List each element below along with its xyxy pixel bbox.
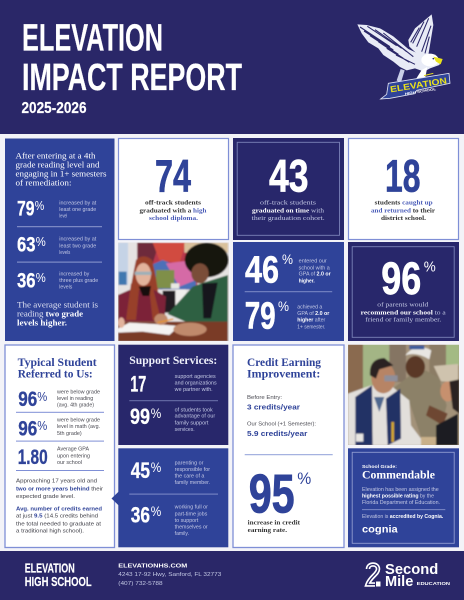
stat: 79 percent GPA: 79	[245, 295, 276, 337]
stat: 1.80 GPA: our school	[57, 460, 82, 466]
stat: 99 percent: %	[151, 406, 161, 421]
typical student paragraphs: expected grade level.	[16, 494, 75, 500]
report year: 2025-2026	[22, 100, 87, 117]
stat: 95 percent: earning rate.	[248, 527, 287, 534]
title: ELEVATION	[22, 18, 163, 60]
logo: Elevation eagle: ELEVATION	[389, 75, 448, 94]
stat: 95 percent: increase in credit	[248, 519, 301, 526]
stat: 17 agencies: support agencies	[175, 374, 216, 380]
panel: 18 returned: students caught up	[375, 200, 433, 207]
panel: 74 diploma: 74	[155, 151, 191, 202]
reading intro text: grade reading level and	[16, 159, 100, 169]
accreditation: Elevation is accredited by Cognia.	[362, 514, 444, 520]
credit earning heading: Improvement:	[247, 369, 320, 381]
credits at our school	[247, 421, 316, 438]
cognia wordmark: cognia	[362, 524, 398, 536]
stat: 96 percent math: %	[37, 418, 48, 433]
panel: 96 percent parents	[348, 242, 459, 341]
school grade label	[362, 464, 435, 482]
panel: family responsibilities	[112, 448, 228, 547]
stat: 17 agencies: we partner with.	[175, 387, 213, 393]
stat: 1.80 GPA: 1.80	[18, 446, 48, 469]
footer contact details: 4243 17-92 Hwy, Sanford, FL 32773	[118, 572, 221, 578]
photo: graduate with family	[346, 342, 461, 449]
stat: 17 agencies: and organizations	[175, 381, 217, 387]
average student text: reading two grade	[17, 309, 83, 319]
header band	[0, 0, 464, 134]
stat: 63 percent: 63	[17, 234, 36, 257]
panel: 18 returned: and returned to their	[371, 207, 435, 214]
stat: 95 percent: 95	[249, 463, 295, 525]
panel: 96 percent parents: %	[424, 259, 436, 275]
stat: 96 percent math: 5th grade)	[57, 431, 82, 437]
panel: 96 percent parents: of parents would	[377, 302, 429, 309]
logo: Elevation eagle: HIGH SCHOOL	[405, 87, 436, 96]
stat: 79 percent: least one grade	[59, 207, 97, 213]
typical student paragraphs: the total needed to graduate at	[16, 521, 101, 527]
credits before entry: 3 credits/year	[247, 402, 300, 411]
credit earning heading: Credit Earning	[247, 357, 321, 369]
panel: 74 diploma: graduated with a high	[140, 207, 207, 214]
panel: 18 returned	[348, 138, 458, 240]
stat: 46 percent: 46	[245, 250, 279, 292]
footer school name: HIGH SCHOOL	[25, 574, 92, 589]
stat: 79 percent: increased by at	[59, 200, 97, 206]
stat: 79 percent: 79	[17, 198, 34, 220]
average student text: The average student is	[17, 300, 99, 310]
stat: 63 percent: increased by at	[59, 237, 97, 243]
stat: 63 percent: %	[36, 234, 46, 249]
stat: 36 percent: three plus grade	[59, 278, 99, 284]
credits at our school: 5.9 credits/year	[247, 429, 307, 438]
stat: 96 percent math: 96	[18, 417, 37, 440]
credits before entry: Before Entry:	[247, 395, 282, 401]
typical student paragraphs: at just 9.5 (14.5 credits behind	[16, 514, 98, 520]
stat: 36 percent: %	[36, 270, 46, 285]
stat: 79 percent GPA: GPA of 2.0 or	[297, 311, 329, 317]
footer school name: ELEVATION	[25, 561, 75, 576]
logo: Second Mile Education: Mile	[385, 573, 413, 590]
grade description: Elevation has been assigned the	[362, 487, 439, 493]
grade description	[362, 487, 440, 506]
stat: 46 percent: GPA of 2.0 or	[299, 272, 331, 278]
stat: 79 percent GPA: achieved a	[297, 304, 323, 310]
stat: 36 percent jobs: family.	[175, 531, 189, 537]
average student text	[17, 300, 99, 328]
footer contact details: (407) 732-5788	[118, 581, 163, 587]
stat: 45 percent: responsible for	[175, 467, 210, 473]
photo: students studying	[116, 240, 231, 343]
stat: 96 percent reading: level in reading	[57, 396, 94, 402]
panel: 43 on time	[233, 138, 344, 240]
typical student paragraphs: two or more years behind their	[16, 486, 103, 492]
stat: 79 percent GPA: higher after	[297, 317, 326, 323]
logo: Second Mile Education: EDUCATION	[417, 581, 450, 586]
stat: 45 percent: %	[151, 460, 161, 475]
title	[22, 18, 242, 99]
callout pointer	[112, 492, 118, 505]
footer	[0, 551, 464, 600]
reading intro text: After entering at a 4th	[16, 150, 96, 160]
stat: 63 percent: least two grade	[59, 243, 97, 249]
stat: 79 percent GPA: %	[278, 299, 289, 314]
average student text: levels higher.	[17, 318, 67, 328]
stat: 36 percent jobs: themselves or	[175, 524, 208, 530]
typical student paragraphs: Avg. number of credits earned	[16, 506, 103, 512]
stat: 79 percent GPA	[245, 295, 329, 337]
stat: 99 percent: advantage of our	[175, 414, 216, 420]
reading intro text: of remediation:	[16, 177, 72, 187]
stat: 36 percent: levels	[59, 285, 73, 291]
stat: 46 percent: entered our	[299, 259, 327, 265]
panel: credit earning	[233, 345, 344, 548]
logo: Second Mile Education: Second	[385, 561, 438, 578]
stat: 1.80 GPA: Average GPA	[57, 447, 90, 453]
stat: 36 percent jobs: working full or	[175, 505, 208, 511]
stat: 99 percent: 99	[130, 404, 150, 429]
panel: school grade	[348, 448, 459, 547]
stat: 45 percent: 45	[131, 458, 150, 483]
credit earning heading	[247, 357, 321, 381]
stat: 96 percent reading	[18, 388, 100, 411]
stat: 45 percent: parenting or	[175, 460, 204, 466]
school grade label: Commendable	[362, 470, 435, 482]
panel: GPA stats	[233, 242, 344, 341]
stat: 63 percent: levels	[59, 250, 71, 256]
logo: Second Mile Education	[368, 561, 450, 590]
stat: 96 percent math: level in math (avg.	[57, 424, 100, 430]
stat: 46 percent: school with a	[299, 265, 330, 271]
stat: 79 percent: level	[59, 214, 67, 220]
typical student paragraphs	[16, 479, 103, 535]
stat: 36 percent jobs: part-time jobs	[175, 511, 208, 517]
footer contact details: ELEVATIONHS.COM	[118, 563, 188, 569]
credits at our school: Our School (+1 Semester):	[247, 421, 316, 427]
stat: 99 percent	[130, 404, 216, 433]
stat: 96 percent reading: %	[37, 389, 48, 404]
panel: 74 diploma: off-track students	[145, 200, 201, 207]
reading intro text	[16, 150, 107, 187]
panel: typical student	[5, 345, 114, 548]
stat: 36 percent: 36	[17, 270, 36, 292]
stat: 96 percent reading: (avg. 4th grade)	[57, 403, 94, 409]
stat: 95 percent: %	[297, 469, 311, 488]
typical student heading: Typical Student	[18, 357, 97, 369]
credits before entry	[247, 395, 300, 411]
typical student paragraphs: Approaching 17 years old and	[16, 479, 97, 485]
stat: 17 agencies: 17	[130, 372, 146, 397]
grade description: Florida Department of Education.	[362, 500, 440, 506]
panel: 43 on time: their graduation cohort.	[252, 215, 325, 222]
typical student heading: Referred to Us:	[18, 369, 93, 381]
panel: 96 percent parents: recommend our school to a	[361, 309, 446, 316]
panel: 74 diploma	[118, 138, 228, 240]
panel: support services	[118, 345, 228, 445]
grade description: highest possible rating by the	[362, 494, 434, 500]
panel: 43 on time: off-track students	[260, 200, 317, 207]
typical student paragraphs: a traditional high school).	[16, 529, 84, 535]
stat: 96 percent reading: 96	[18, 388, 37, 411]
stat: 1.80 GPA: upon entering	[57, 453, 90, 459]
stat: 99 percent: of students took	[175, 407, 213, 413]
panel: 43 on time: graduated on time with	[252, 207, 325, 214]
stat: 36 percent jobs: to support	[175, 518, 199, 524]
stat: 45 percent	[131, 458, 210, 486]
panel: 74 diploma: school diploma.	[149, 215, 198, 222]
stat: 96 percent math	[18, 417, 100, 440]
stat: 96 percent reading: were below grade	[57, 389, 100, 395]
stat: 17 agencies	[130, 372, 217, 397]
stat: 46 percent: higher.	[299, 278, 315, 284]
panel: 96 percent parents: 96	[381, 253, 421, 304]
panel: reading gains	[5, 138, 114, 341]
support services heading: Support Services:	[129, 355, 217, 367]
stat: 46 percent	[245, 250, 331, 292]
stat: 1.80 GPA	[18, 446, 90, 469]
stat: 99 percent: family support	[175, 420, 209, 426]
stat: 45 percent: family member.	[175, 480, 210, 486]
panel: 18 returned: district school.	[381, 215, 426, 222]
school grade label: School Grade:	[362, 464, 398, 469]
reading intro text: engaging in 1+ semesters	[16, 168, 107, 178]
stat: 79 percent	[17, 198, 97, 220]
stat: 46 percent: %	[282, 252, 293, 267]
stat: 36 percent: increased by	[59, 271, 90, 277]
stat: 63 percent	[17, 234, 97, 257]
stat: 79 percent GPA: 1+ semester.	[297, 324, 325, 330]
stat: 79 percent: %	[35, 198, 45, 213]
stat: 36 percent	[17, 270, 99, 292]
typical student heading	[18, 357, 97, 381]
stat: 45 percent: the care of a	[175, 473, 205, 479]
stat: 36 percent jobs: %	[151, 504, 161, 519]
stat: 36 percent jobs	[131, 502, 208, 537]
logo: Elevation eagle	[357, 14, 450, 99]
stat: 96 percent math: were below grade	[57, 418, 100, 424]
footer contact details	[118, 563, 221, 587]
stat: 99 percent: services.	[175, 427, 195, 433]
panel: 96 percent parents: friend or family member.	[365, 317, 442, 324]
stat: 36 percent jobs: 36	[131, 502, 150, 527]
footer school name	[25, 561, 92, 589]
title: IMPACT REPORT	[22, 57, 242, 99]
panel: 43 on time: 43	[269, 151, 308, 202]
panel: 18 returned: 18	[385, 151, 420, 202]
